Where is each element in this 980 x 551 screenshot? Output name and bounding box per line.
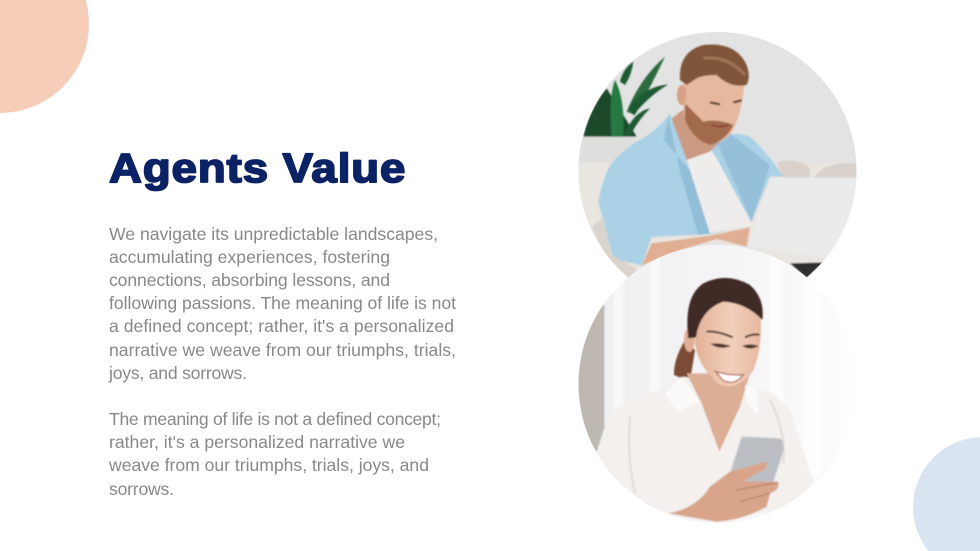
paragraph one: joys, and sorrows. xyxy=(108,363,247,383)
paragraph two: sorrows. xyxy=(109,479,174,499)
hair xyxy=(680,45,749,86)
paragraph one: We navigate its unpredictable landscapes, xyxy=(109,224,438,244)
paragraph one xyxy=(108,224,456,383)
paragraph two: weave from our triumphs, trials, joys, and xyxy=(108,455,429,475)
face xyxy=(682,74,745,142)
laptop xyxy=(749,177,856,258)
blouse folds xyxy=(629,400,784,493)
title: Agents Value xyxy=(109,146,405,191)
ear xyxy=(684,328,695,352)
blouse xyxy=(597,377,813,517)
eyes and mouth xyxy=(707,332,759,337)
face xyxy=(695,300,761,386)
t-shirt xyxy=(687,148,753,233)
sofa xyxy=(578,178,823,278)
paragraph one: a defined concept; rather, it's a personalized xyxy=(109,316,454,336)
paragraph one: accumulating experiences, fostering xyxy=(109,247,390,267)
paragraph two xyxy=(108,409,441,499)
hair xyxy=(687,278,763,338)
neck and chest xyxy=(687,373,750,452)
paragraph one: following passions. The meaning of life is not xyxy=(109,293,456,313)
neck xyxy=(672,108,723,160)
paragraph one: narrative we weave from our triumphs, trials, xyxy=(109,340,456,360)
paragraph two: rather, it's a personalized narrative we xyxy=(109,432,405,452)
phone xyxy=(730,436,784,482)
hand xyxy=(668,462,779,522)
ear xyxy=(677,85,686,105)
stone wall xyxy=(570,305,604,452)
beard xyxy=(685,103,733,145)
photo: man with laptop xyxy=(578,32,856,278)
eyes and mouth xyxy=(710,100,742,104)
shirt xyxy=(598,113,783,266)
sleeve shadow xyxy=(592,217,637,282)
paragraph one: connections, absorbing lessons, and xyxy=(109,270,390,290)
plant xyxy=(583,57,668,137)
forearm and hand xyxy=(642,227,750,266)
decorative peach circle xyxy=(0,0,89,113)
curtain stripes xyxy=(616,258,807,405)
photo: woman with phone xyxy=(578,245,814,523)
decorative blue circle xyxy=(913,437,980,551)
ponytail xyxy=(674,340,695,382)
paragraph two: The meaning of life is not a defined concept; xyxy=(109,409,441,429)
plant pot xyxy=(578,137,638,162)
cushions xyxy=(777,160,857,178)
collar xyxy=(665,377,758,415)
